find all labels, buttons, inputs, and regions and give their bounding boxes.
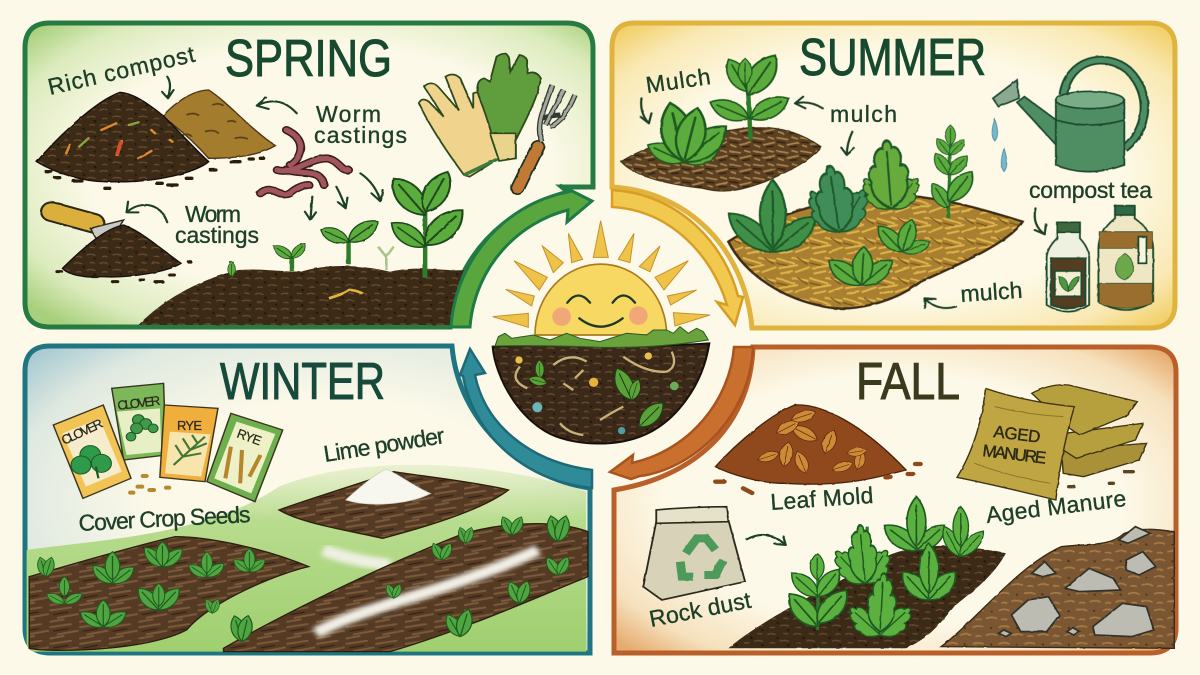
heading: winter: WINTER — [220, 353, 385, 411]
winter plants — [35, 514, 573, 643]
arrows: worms to plants — [305, 173, 383, 220]
label: cover crop seeds: Cover Crop Seeds — [78, 501, 251, 536]
icon: gloves — [419, 54, 541, 177]
lime pile — [346, 469, 431, 504]
green field — [27, 465, 586, 652]
plants: top — [643, 50, 793, 170]
label: rich compost: Rich compost — [45, 41, 198, 100]
icon: rock dust bag — [643, 507, 745, 600]
arrow: to trowel — [127, 202, 167, 222]
label: mulch 2: mulch — [830, 101, 897, 127]
arrow: to bottles — [1035, 208, 1046, 234]
right soil row — [224, 524, 588, 652]
lime patch — [279, 472, 508, 538]
label: manure bag: MANURE — [982, 441, 1047, 468]
label: leaf mold: Leaf Mold — [770, 482, 874, 515]
label: mulch 3: mulch — [960, 277, 1023, 307]
icon: hand fork — [518, 85, 575, 188]
label: aged manure: Aged Manure — [984, 485, 1128, 528]
arrow: spring to summer — [451, 185, 592, 327]
panel: summer — [612, 23, 1175, 328]
arrow: rock bag to plants — [747, 535, 786, 545]
illustrations: summer — [621, 50, 1153, 312]
label: worm castings lower: Worm — [185, 201, 241, 227]
heading: spring: SPRING — [225, 30, 392, 88]
soil details — [329, 290, 362, 298]
icon: seed packets — [53, 383, 283, 502]
fall plants — [781, 497, 989, 643]
grass — [495, 327, 708, 347]
arrow: winter to spring — [460, 349, 592, 488]
label: aged manure bag: AGED — [993, 422, 1041, 447]
illustrations: fall — [643, 385, 1174, 648]
heading: fall: FALL — [856, 353, 960, 411]
label: lime powder: Lime powder — [322, 422, 447, 467]
label: castings lower: castings — [175, 222, 259, 248]
compost piles — [37, 90, 275, 188]
label: mulch: Mulch — [644, 63, 712, 98]
icon: trowel and pile — [51, 212, 191, 282]
label: castings: castings — [314, 122, 407, 148]
icon: bottles — [1047, 206, 1153, 312]
plants: bed — [721, 125, 980, 292]
label: rock dust: Rock dust — [647, 587, 754, 632]
left soil row — [29, 537, 309, 650]
label: rye packet: RYE — [177, 418, 202, 433]
lime scatter — [323, 550, 390, 565]
lime streak — [316, 550, 538, 633]
label: worm castings: Worm — [316, 101, 381, 127]
icon: watering can — [993, 60, 1144, 172]
leaf mold pile — [715, 405, 920, 493]
top mulch — [621, 127, 821, 191]
label: compost tea: compost tea — [1029, 177, 1152, 203]
label: clover packet 2: CLOVER — [117, 393, 161, 413]
icon: sun and soil bowl — [493, 221, 710, 444]
straw bed — [728, 195, 1023, 308]
sun — [535, 264, 667, 335]
label: clover packet: CLOVER — [59, 416, 105, 448]
arrow: fall to winter — [610, 347, 753, 479]
panel: spring — [25, 23, 593, 327]
icon: manure bags — [957, 385, 1146, 500]
illustrations: winter — [27, 383, 588, 652]
water drops — [992, 119, 1007, 172]
seeds — [130, 476, 169, 493]
rocky soil — [941, 527, 1174, 648]
arrow: summer to fall — [612, 190, 743, 325]
label: rye packet 2: RYE — [235, 426, 264, 448]
soil bowl — [493, 343, 709, 444]
seedlings — [228, 167, 471, 278]
sun face — [552, 295, 648, 327]
illustrations: spring — [37, 54, 575, 325]
panel: fall — [614, 347, 1176, 653]
fall soil bed — [728, 546, 1006, 648]
heading: summer: SUMMER — [799, 29, 986, 87]
arrows: spring top — [162, 77, 297, 113]
icon: worms — [260, 130, 349, 194]
soil contents — [515, 352, 679, 435]
arrows: summer — [640, 97, 956, 308]
sun rays — [493, 221, 710, 327]
panel: winter — [25, 346, 590, 653]
soil mound — [138, 266, 464, 325]
